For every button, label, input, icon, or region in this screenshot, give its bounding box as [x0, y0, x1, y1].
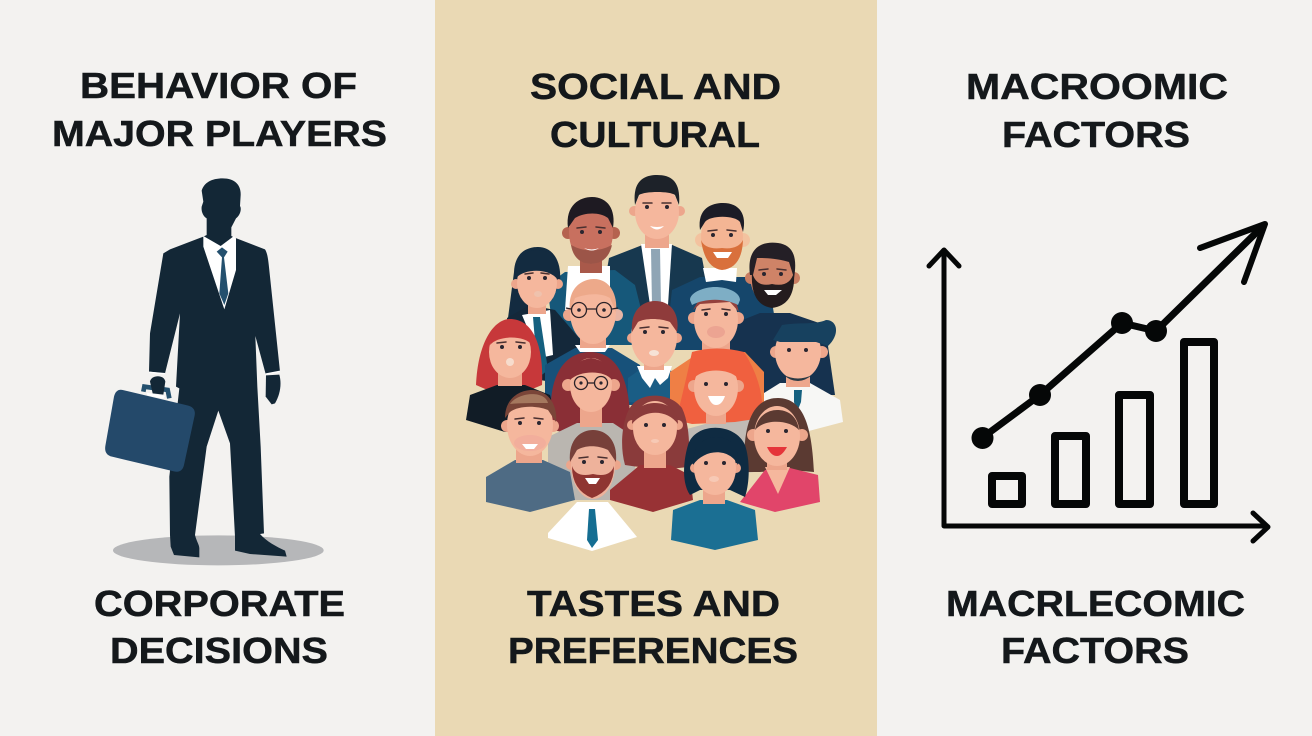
person: woman with dark hair and teal tie [507, 247, 585, 385]
person: man with cap [688, 287, 744, 358]
person: man with black beard [730, 243, 835, 395]
caption: tastes and preferences: TASTES AND [527, 583, 780, 624]
person: man with dark skin and white shirt [547, 197, 650, 345]
caption: corporate decisions: DECISIONS [110, 630, 328, 671]
panel: behavior of major players [0, 0, 435, 736]
person: bald man with glasses [545, 279, 650, 405]
person: woman with red hair [466, 319, 560, 432]
person: man with dark hat and white shirt [748, 320, 843, 432]
caption: tastes and preferences: PREFERENCES [508, 630, 798, 671]
person: bearded man in white shirt with tie [548, 430, 637, 551]
person: woman with orange hair and smile [670, 348, 770, 480]
trend line with arrow [972, 224, 1265, 449]
heading: social and cultural [530, 66, 781, 155]
caption: macrlecomic factors [946, 583, 1245, 671]
person: centre man with auburn hair [627, 301, 682, 405]
person: top centre man in suit [600, 175, 712, 310]
heading: macroomic factors: FACTORS [1002, 114, 1190, 155]
person: woman with auburn hair and maroon top [610, 396, 693, 512]
heading: macroomic factors [966, 66, 1228, 155]
icon: businessman silhouette with briefcase [105, 178, 324, 565]
heading: behavior of major players: BEHAVIOR OF [80, 65, 357, 106]
person: man with orange beard [665, 203, 780, 350]
heading: social and cultural: SOCIAL AND [530, 66, 781, 107]
caption: corporate decisions [94, 583, 345, 671]
heading: behavior of major players: MAJOR PLAYERS [52, 113, 387, 154]
person: woman with glasses [548, 352, 640, 500]
bars [992, 342, 1214, 504]
caption: tastes and preferences [508, 583, 798, 671]
heading: behavior of major players [52, 65, 387, 154]
caption: corporate decisions: CORPORATE [94, 583, 345, 624]
panel: social and cultural [435, 0, 877, 736]
heading: macroomic factors: MACROOMIC [966, 66, 1228, 107]
heading: social and cultural: CULTURAL [550, 114, 760, 155]
illustration: crowd of diverse people [466, 175, 843, 551]
person: man with blue-grey sweater [486, 390, 575, 512]
caption: macrlecomic factors: MACRLECOMIC [946, 583, 1245, 624]
panel: macroomic factors [877, 0, 1312, 736]
person: woman with long brown hair and pink top [740, 398, 820, 512]
chart: bars with rising trend arrow [929, 224, 1268, 541]
person: woman with black hair and teal top [671, 428, 758, 550]
chart axes [929, 250, 1268, 541]
caption: macrlecomic factors: FACTORS [1001, 630, 1189, 671]
